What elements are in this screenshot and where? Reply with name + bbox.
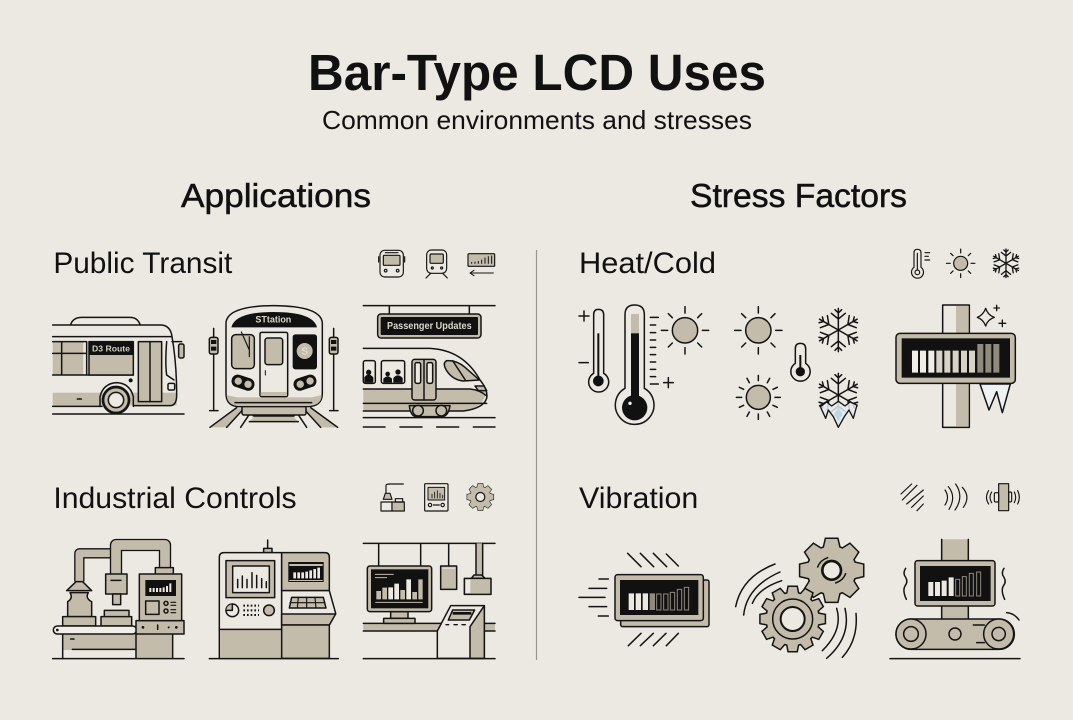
panel: heat/cold — [579, 247, 1021, 427]
icon: mini vibrating device — [986, 484, 1019, 511]
heading: Industrial Controls: Industrial Controls — [53, 482, 297, 515]
icon: mini gear — [467, 484, 493, 510]
panel: vibration — [579, 482, 1020, 659]
icon: mini bus — [379, 250, 405, 277]
panel: industrial controls — [53, 482, 495, 659]
illustration: control cabinet — [209, 540, 338, 659]
icon: mini snowflake — [991, 249, 1021, 278]
heading: Vibration: Vibration — [579, 482, 698, 515]
illustration: thermometers and sun — [579, 305, 709, 424]
illustration: station train: S — [301, 347, 308, 358]
icon: mini thermometer — [911, 249, 930, 278]
illustration: shaking display — [579, 553, 709, 646]
title: Bar-Type LCD Uses — [308, 44, 766, 101]
illustration: display in cold — [896, 305, 1015, 427]
icon: mini robot — [381, 484, 404, 511]
heading: Stress Factors: Stress Factors — [690, 177, 907, 214]
station sign text: STtation — [255, 315, 291, 325]
heading: Heat/Cold: Heat/Cold — [579, 247, 716, 280]
illustration: station train — [209, 306, 338, 427]
illustration: gears — [736, 539, 863, 658]
heading: Applications: Applications — [181, 177, 371, 214]
heading: Public Transit: Public Transit — [53, 247, 233, 280]
illustration: robot arm — [53, 545, 184, 659]
illustration: bus — [53, 317, 184, 414]
passenger updates text: Passenger Updates — [387, 321, 472, 332]
subtitle: Common environments and stresses — [322, 105, 752, 135]
illustration: factory monitor station — [363, 543, 495, 659]
icon: mini train — [426, 250, 447, 278]
icon: mini sun — [946, 249, 975, 278]
icon: mini hatch lines — [901, 484, 923, 511]
icon: mini wave arcs — [945, 484, 967, 510]
panel: public transit — [53, 247, 495, 427]
icon: mini display — [468, 254, 495, 276]
illustration: passenger train — [363, 306, 495, 427]
bus route label: D3 Route — [92, 343, 130, 353]
illustration: suns and snowflakes — [735, 307, 861, 427]
illustration: display on conveyor — [890, 539, 1020, 659]
icon: mini control panel — [425, 484, 448, 511]
